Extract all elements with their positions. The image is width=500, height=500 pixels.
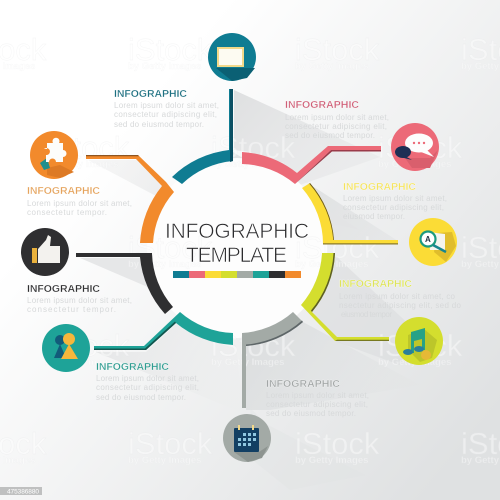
segment: dark teal [94, 312, 233, 350]
segment: teal top [172, 89, 233, 184]
watermarks: by Getty Images [128, 455, 201, 466]
segment: gray [242, 312, 303, 408]
watermarks: iStock [45, 130, 130, 165]
text block: teal: sed do eiusmod tempor. [114, 120, 204, 129]
icon: thumbs up [21, 228, 69, 276]
watermarks: iStock [378, 130, 463, 165]
text block: black: consectetur tempor. [27, 305, 116, 314]
title [165, 220, 309, 267]
segment: yellow [302, 183, 398, 244]
watermarks: iStock [128, 230, 213, 265]
long shadows [80, 90, 420, 490]
icon: puzzle piece [30, 131, 78, 179]
watermarks: iStock [378, 328, 463, 363]
watermarks: by Getty Images [295, 455, 368, 466]
text block: gray [266, 378, 369, 418]
text block: dark teal: INFOGRAPHIC [96, 361, 169, 373]
text block: pink [285, 99, 389, 140]
watermarks: iStock [211, 328, 296, 363]
text block: teal: INFOGRAPHIC [114, 88, 187, 100]
icon: speech bubbles [391, 123, 439, 171]
text block: gray: INFOGRAPHIC [266, 378, 340, 390]
watermarks: iStock [295, 230, 380, 265]
text block: orange: consectetur tempor. [27, 208, 107, 217]
text block: teal [114, 88, 219, 129]
segment: pink [242, 146, 381, 184]
watermarks: by Getty Images [295, 259, 368, 270]
segment: orange [86, 155, 174, 243]
text block: yellow: consectetur adipiscing elit, [343, 203, 444, 212]
text block: orange [27, 185, 132, 217]
text block: yellow: eiusmod tempor. [343, 212, 405, 221]
icon: slate screen [208, 33, 256, 81]
text block: black: Lorem ipsum dolor sit amet, [27, 296, 132, 305]
icon: person [42, 324, 90, 372]
watermarks: iStock [45, 328, 130, 363]
watermarks: by Getty Images [128, 259, 201, 270]
text block: dark teal: consectetur adipiscing elit, [96, 383, 199, 392]
text block: orange: INFOGRAPHIC [27, 185, 100, 197]
text block: dark teal: Lorem ipsum dolor sit amet, [96, 374, 199, 383]
text block: yellow [343, 181, 447, 221]
watermarks: by Getty [461, 259, 500, 270]
text block: dark teal [96, 361, 199, 402]
watermarks: by Getty Images [378, 159, 451, 170]
image id tag: 475386880 [7, 488, 39, 496]
icon: music note [395, 317, 443, 365]
watermarks: by Getty Images [211, 357, 284, 368]
text block: pink: consectetur adipiscing elit, [285, 122, 387, 131]
watermarks: by Getty Images [128, 61, 201, 72]
segment: black [76, 253, 173, 314]
watermarks: iStock [128, 426, 213, 461]
text block: pink: Lorem ipsum dolor sit amet, [285, 113, 389, 122]
text block: pink: INFOGRAPHIC [285, 99, 359, 111]
text block: gray: sed do eiusmod tempor. [266, 409, 356, 418]
text block: gray: Lorem ipsum dolor sit amet, [266, 391, 369, 400]
image id tag [0, 487, 42, 496]
text block: yellow: Lorem ipsum dolor sit amet, [343, 194, 447, 203]
text block: teal: consectetur adipiscing elit, [114, 110, 217, 119]
segment: lime [301, 253, 389, 341]
title: INFOGRAPHIC [165, 220, 309, 243]
text block: gray: consectetur adipiscing elit, [266, 400, 368, 409]
watermarks: by Getty Images [45, 357, 118, 368]
text block: lime: eiusmod tempor [341, 310, 392, 319]
text block: orange: Lorem ipsum dolor sit amet, [27, 199, 132, 208]
watermarks: by Getty Images [378, 357, 451, 368]
watermarks: by Getty Images [211, 159, 284, 170]
text block: lime: INFOGRAPHIC [339, 278, 412, 290]
icon: calendar [223, 414, 271, 462]
watermarks: iStock [128, 32, 213, 67]
text block: lime: Lorem ipsum dolor sit amet, co [339, 292, 456, 301]
watermarks: by Getty [461, 455, 500, 466]
icon: magnifier [409, 218, 457, 266]
text block: dark teal: sed do eiusmod tempor. [96, 393, 186, 402]
color bar [173, 271, 301, 278]
title: TEMPLATE [186, 244, 287, 267]
watermarks: iStock [295, 32, 380, 67]
center circle [147, 158, 327, 338]
watermarks: by Getty Images [295, 61, 368, 72]
text block: lime: nsectetur adipiscing elit, sed do [339, 301, 462, 310]
text block: teal: Lorem ipsum dolor sit amet, [114, 101, 219, 110]
watermarks: iStock [211, 130, 296, 165]
watermarks: by Getty Images [45, 159, 118, 170]
text block: pink: sed do eiusmod tempor. [285, 131, 375, 140]
text block: yellow: INFOGRAPHIC [343, 181, 416, 193]
text block: black [27, 283, 132, 314]
icon: magnifier: A [425, 235, 431, 244]
text block: black: INFOGRAPHIC [27, 283, 100, 295]
text block: lime [339, 278, 462, 319]
watermarks: iStock [295, 426, 380, 461]
watermarks: by Getty [461, 61, 500, 72]
